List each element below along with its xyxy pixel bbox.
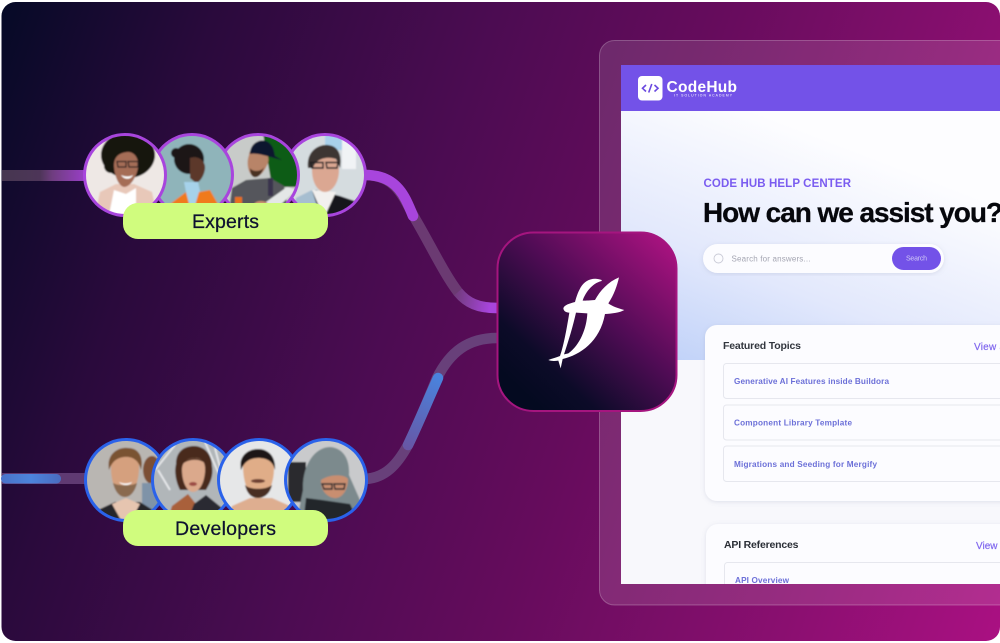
avatar: developer 3 — [217, 438, 292, 510]
card heading: Featured Topics — [723, 340, 801, 352]
search button — [892, 247, 941, 270]
avatar: expert 4 — [292, 133, 367, 217]
search bar — [703, 244, 944, 273]
icon: search — [714, 254, 723, 263]
connector: developers to logo — [365, 338, 497, 479]
search button: Search — [906, 256, 927, 262]
icon: code logo — [638, 76, 662, 100]
icon: stylised f logo — [548, 277, 624, 368]
topic row 3: Migrations and Seeding for Mergify — [734, 460, 877, 469]
hero background — [621, 140, 1000, 360]
avatar: expert 3 — [225, 133, 300, 203]
card: api references — [705, 532, 1000, 584]
avatar: expert 1 — [83, 132, 167, 222]
topic row 1 — [724, 364, 1000, 398]
experts avatar group — [83, 132, 367, 222]
card link: View — [976, 541, 998, 552]
eyebrow heading: CODE HUB HELP CENTER — [704, 178, 852, 190]
connector: experts to logo — [365, 175, 497, 308]
connector: experts input line — [2, 170, 86, 181]
page body background — [621, 360, 1000, 584]
developers label — [123, 510, 328, 546]
avatar: developer 4 — [284, 438, 368, 525]
logo tile — [498, 232, 676, 411]
avatar: developer 2 — [151, 438, 226, 510]
experts label: Experts — [192, 211, 259, 233]
topic row 1: Generative AI Features inside Buildora — [734, 377, 889, 386]
search placeholder: Search for answers... — [732, 254, 810, 264]
avatar: developer 1 — [84, 438, 160, 522]
product window frame — [600, 40, 1000, 605]
api row: API Overview — [735, 576, 790, 585]
experts label — [123, 203, 328, 239]
topic row 3 — [724, 446, 1000, 482]
brand tagline: IT SOLUTION ACADEMY — [674, 94, 733, 98]
connector: developers input line — [1, 473, 86, 484]
card heading: API References — [724, 539, 799, 551]
avatar: expert 2 — [158, 133, 234, 203]
api row — [724, 562, 1000, 584]
header bar — [621, 65, 1000, 111]
developers avatar group — [84, 438, 368, 525]
developers label: Developers — [175, 518, 276, 540]
main heading: How can we assist you? — [703, 197, 1000, 228]
help center screen — [621, 65, 1000, 584]
brand name: CodeHub — [666, 79, 737, 96]
card: featured topics — [705, 325, 1000, 501]
topic row 2 — [724, 405, 1000, 440]
topic row 2: Component Library Template — [734, 418, 852, 428]
